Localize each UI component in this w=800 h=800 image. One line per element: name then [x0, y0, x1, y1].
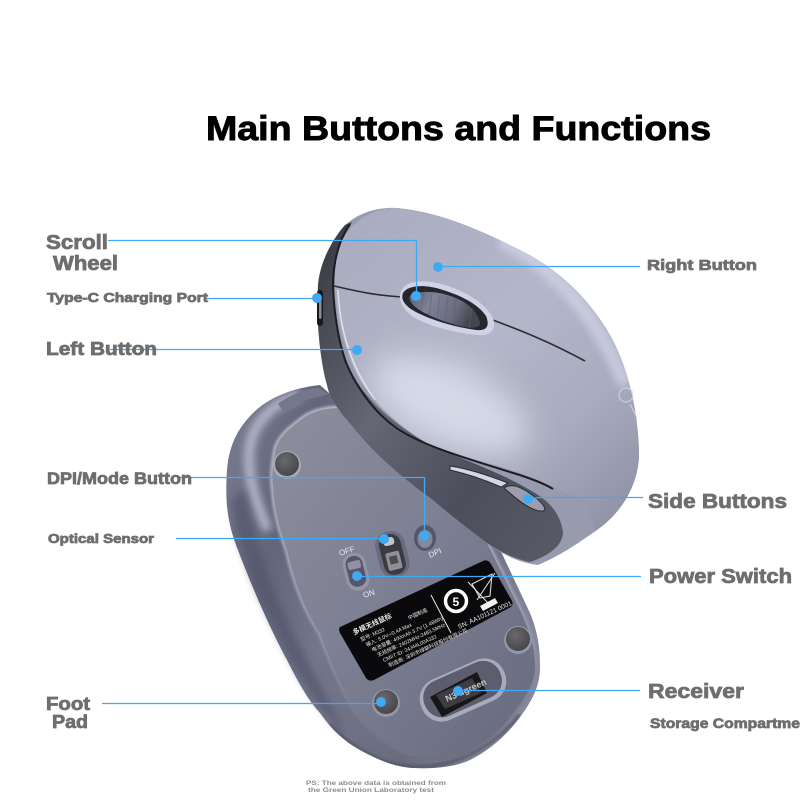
wheel ridges	[421, 292, 472, 328]
top mouse (top view)	[317, 208, 639, 565]
label: scroll wheel: Wheel	[53, 253, 118, 275]
callout: side buttons	[523, 494, 643, 504]
label specification text: 电池容量: 400mAh 3.7V (1.48Wh)	[370, 614, 445, 654]
callout: dpi button	[180, 478, 429, 541]
top surface	[335, 208, 639, 530]
button split line left	[334, 286, 403, 297]
callout: scroll wheel	[108, 240, 421, 301]
base plate rim	[272, 408, 535, 758]
mouse underside shell	[226, 385, 540, 768]
dark side band	[317, 222, 563, 562]
callout: right button	[433, 262, 640, 272]
title: Main Buttons and Functions	[206, 110, 711, 148]
foot pad: top-left	[273, 451, 301, 479]
footnote: PS: The above data is obtained from	[306, 780, 446, 787]
mouse outer shell	[317, 208, 639, 565]
label specification text: 型号: M332 中国制造	[359, 605, 429, 643]
footnote: the Green Union Laboratory test	[308, 787, 435, 794]
power switch	[338, 544, 376, 600]
label divider	[431, 595, 451, 633]
label: optical sensor: Optical Sensor	[48, 531, 154, 546]
shell dark side shading	[232, 490, 345, 735]
callout: foot pad	[102, 697, 386, 707]
DPI button: DPI	[427, 546, 443, 560]
callout: left button	[110, 345, 362, 355]
scroll wheel	[400, 281, 494, 335]
label specification text: 无线频率: 2402MHz-2483.5MHz	[376, 621, 447, 659]
foot pad: bottom-left	[372, 689, 400, 717]
callout: type-c port	[206, 293, 322, 303]
callout: power switch	[352, 571, 641, 581]
Type-C port	[317, 290, 323, 326]
shell bottom dark edge	[330, 715, 520, 767]
label: foot pad: Foot	[46, 694, 90, 714]
label: scroll wheel	[46, 232, 118, 275]
bottom mouse (underside view)	[226, 385, 540, 768]
label specification text: 输入: 5.0V⎓0.4A Max	[365, 620, 413, 648]
footnote	[306, 780, 446, 794]
label specification text: 制造商: 深圳市绿联科技股份有限公司	[387, 626, 469, 669]
callout: receiver	[453, 686, 640, 696]
receiver text: N3 ugreen	[444, 677, 488, 704]
compliance icon: 5	[452, 595, 460, 609]
logo mark	[619, 388, 637, 418]
optical sensor	[372, 528, 413, 581]
label specification text: CMIIT ID: 24J44L00A332	[382, 634, 438, 664]
white bar	[480, 598, 498, 611]
callout lines and dots	[102, 240, 643, 707]
surface highlights	[338, 240, 625, 475]
label: right button: Right Button	[647, 257, 757, 274]
recycling bin icon	[468, 573, 495, 603]
shell highlight band	[249, 395, 300, 530]
button split line right	[490, 319, 585, 361]
product label	[339, 560, 513, 681]
label: foot pad: Pad	[52, 712, 88, 732]
label specification text	[351, 585, 469, 677]
power switch: ON	[362, 588, 376, 600]
compliance icon	[446, 590, 466, 612]
side buttons	[450, 466, 545, 511]
label: dpi/mode button: DPI/Mode Button	[47, 469, 192, 488]
DPI button	[414, 525, 443, 560]
serial number: SN: AA101121 0001	[457, 600, 513, 631]
power switch: OFF	[338, 544, 356, 558]
label: foot pad	[46, 694, 90, 732]
foot pad: right	[504, 626, 532, 654]
label: left button: Left Button	[46, 339, 157, 359]
label: type-c charging port: Type-C Charging Port	[47, 290, 209, 305]
label: storage compartment (clipped at right edge): Storage Compartme	[650, 715, 800, 731]
receiver storage compartment	[413, 652, 513, 728]
black seam along edge	[333, 224, 553, 489]
label: receiver: Receiver	[648, 681, 744, 703]
base plate	[272, 408, 535, 758]
label: side buttons: Side Buttons	[648, 491, 787, 513]
thumb recess on shell top	[278, 388, 329, 411]
label: power switch: Power Switch	[649, 566, 792, 588]
callout: optical sensor	[176, 534, 389, 544]
label specification text: 多模无线鼠标	[351, 611, 393, 637]
label: scroll wheel: Scroll	[46, 232, 108, 254]
